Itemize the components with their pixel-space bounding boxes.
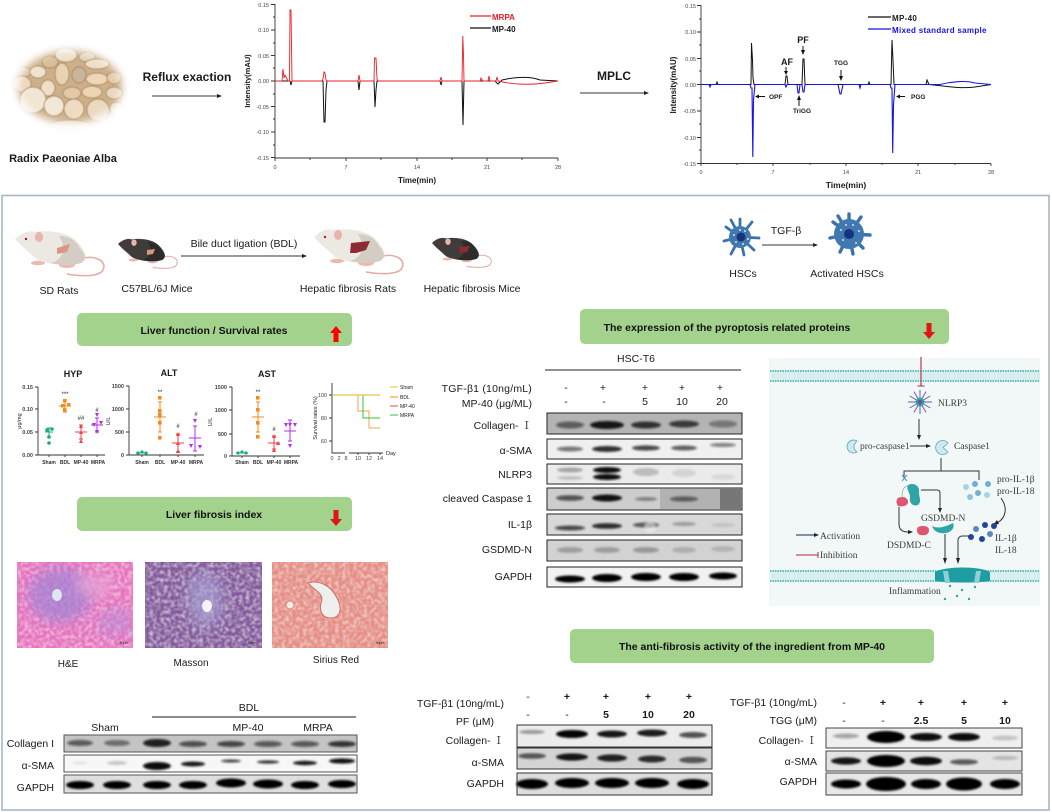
image: H&E histology — [17, 562, 133, 648]
chart: MP-40 vs mixed standard chromatogram: 28 — [988, 170, 994, 176]
western blot: in vivo: Collagen I — [7, 738, 54, 750]
panel: main experimental frame — [2, 196, 1049, 810]
western blot: in vivo: α-SMA — [22, 760, 54, 772]
icon: SD rat — [15, 231, 104, 276]
treatment grid: - — [526, 709, 530, 721]
membrane: bottom — [770, 571, 1040, 581]
treatment grid: 20 — [716, 396, 728, 408]
chart: HYP: ## — [78, 416, 85, 422]
treatment grid: - — [526, 691, 530, 703]
chart: HYP: 0.05 — [22, 430, 33, 436]
label: Masson: Masson — [173, 658, 209, 669]
treatment grid: 5 — [642, 396, 648, 408]
banner: liver fibrosis index: Liver fibrosis index — [166, 509, 262, 521]
legend: MP-40 / mixed standard: Mixed standard sample — [892, 26, 987, 35]
label: DSDMD-C: DSDMD-C — [887, 541, 931, 551]
chart: MRPA vs MP-40 chromatogram: 0 — [273, 165, 277, 171]
label: IL mature — [995, 534, 1017, 556]
chart: survival rates — [313, 383, 415, 462]
chart: survival rates: Survival rates (%) — [313, 396, 319, 440]
chart: HYP: Sham — [42, 460, 56, 466]
treatment grid: + — [603, 691, 609, 703]
trace: mixed standard blue — [701, 81, 991, 157]
label: H&E: H&E — [58, 659, 79, 670]
western blot: HSC-T6 pyroptosis: HSC-T6 — [617, 353, 655, 365]
legend: activation / inhibition — [796, 532, 860, 561]
label: Radix Paeoniae Alba: Radix Paeoniae Alba — [9, 153, 118, 165]
chart: ALT: 1500 — [112, 384, 124, 390]
chart: MP-40 vs mixed standard chromatogram: -0.10 — [683, 136, 696, 142]
label: IL mature: IL-18 — [995, 546, 1017, 556]
image: Masson histology: 50μm — [248, 641, 256, 645]
icon: HSC — [724, 219, 759, 255]
banner: pyroptosis proteins — [580, 309, 949, 344]
blot: Collagen I — [64, 735, 357, 752]
chart: HYP: 0.15 — [22, 385, 33, 391]
image: Sirius Red histology — [272, 562, 388, 648]
blot: Collagen-I — [547, 413, 742, 434]
treatment grid — [526, 691, 695, 721]
icon: Caspase1 — [936, 440, 948, 455]
chart: survival rates: 10 — [355, 456, 361, 462]
chart: survival rates: 80 — [321, 416, 327, 422]
treatment grid: 5 — [603, 709, 609, 721]
treatment grid: + — [961, 697, 967, 709]
icon: red up arrow — [330, 326, 342, 342]
label: Hepatic fibrosis Mice: Hepatic fibrosis Mice — [424, 283, 521, 295]
peak labels: OPF — [769, 94, 782, 101]
western blot: HSC-T6 pyroptosis: IL-1β — [508, 519, 532, 531]
icon: activated HSC — [830, 214, 870, 254]
legend: survival groups: Sham — [400, 385, 413, 391]
chart: AST: MRPA — [284, 460, 299, 466]
treatment grid: - — [881, 715, 885, 727]
banner: pyroptosis proteins: The expression of the pyroptosis related proteins — [604, 322, 851, 334]
chart: HYP: HYP — [64, 369, 82, 379]
chart: MRPA vs MP-40 chromatogram: 14 — [414, 165, 420, 171]
western blot: HSC-T6 pyroptosis: Collagen- Ⅰ — [474, 420, 532, 432]
chart: AST: # — [272, 427, 276, 433]
blot: Collagen-I — [826, 728, 1022, 748]
western blot: HSC-T6 pyroptosis: TGF-β1 (10ng/mL) — [442, 383, 532, 395]
chart: survival rates: Day — [386, 451, 396, 457]
arrow: pro-IL to IL — [993, 498, 1005, 525]
chart: ALT: BDL — [155, 460, 165, 466]
arrow: to GSDMD-N — [921, 490, 942, 513]
western blot: PF treatment: TGF-β1 (10ng/mL) — [417, 698, 504, 710]
chart: MP-40 vs mixed standard chromatogram: -0.15 — [683, 162, 696, 168]
label: Bile duct ligation: Bile duct ligation (BDL) — [191, 238, 297, 250]
western blot: in vivo: MRPA — [303, 722, 333, 734]
chart: HYP: MRPA — [91, 460, 106, 466]
arrow: reflux extraction — [152, 94, 222, 98]
chart: AST — [208, 369, 300, 466]
chart: survival rates: 12 — [366, 456, 372, 462]
treatment grid: + — [642, 382, 648, 394]
chart: MRPA vs MP-40 chromatogram: 7 — [344, 165, 348, 171]
chart: AST: 0 — [224, 454, 227, 460]
peak labels — [755, 35, 925, 115]
treatment grid: 5 — [961, 715, 967, 727]
arrow: pro-caspase to caspase — [910, 444, 931, 448]
icon: hepatic fibrosis rat — [314, 229, 403, 274]
treatment grid: + — [600, 382, 606, 394]
chart: survival rates: 14 — [377, 456, 383, 462]
peak labels: TGG — [834, 60, 848, 67]
legend: survival groups: MRPA — [400, 413, 415, 419]
icon: red down arrow — [330, 510, 342, 526]
chart: ALT: 500 — [115, 430, 124, 436]
chart: ALT: ALT — [161, 368, 178, 378]
icon: full-length GSDMD — [896, 475, 920, 506]
chart: MP-40 vs mixed standard chromatogram: 21 — [915, 170, 921, 176]
chart: MP-40 vs mixed standard chromatogram: 0.15 — [685, 4, 696, 10]
western blot: HSC-T6 pyroptosis: GAPDH — [495, 571, 532, 583]
label: pro-IL: pro-IL-18 — [997, 487, 1035, 497]
label: pro-IL: pro-IL-1β — [997, 475, 1035, 485]
icon: hepatic fibrosis mouse — [432, 238, 491, 267]
chart: survival rates: 0 — [330, 456, 334, 462]
label: SD Rats: SD Rats — [39, 285, 79, 297]
western blot: TGG treatment: TGF-β1 (10ng/mL) — [730, 697, 817, 709]
blot: α-SMA — [517, 748, 712, 769]
arrow: NLRP3 to caspase — [917, 419, 921, 440]
chart: AST: 1000 — [215, 408, 227, 414]
arrow: activation — [762, 243, 818, 247]
banner: liver fibrosis index — [77, 497, 352, 531]
chart: HYP: # — [95, 408, 99, 414]
western blot: PF treatment — [417, 691, 712, 795]
label: HSCs: HSCs — [729, 268, 757, 280]
label: C57BL/6J Mice: C57BL/6J Mice — [121, 283, 193, 295]
banner: liver function: Liver function / Survival rates — [140, 325, 288, 337]
treatment grid: - — [564, 382, 568, 394]
chart: MRPA vs MP-40 chromatogram: Time(min) — [398, 176, 436, 185]
branch connector — [904, 458, 979, 480]
legend: survival groups: MP-40 — [400, 404, 415, 410]
western blot: in vivo: Sham — [91, 722, 119, 734]
western blot: in vivo — [7, 702, 357, 794]
chart: ALT: MRPA — [189, 460, 204, 466]
chart: ALT: # — [176, 424, 180, 430]
icon: GSDMD-N fragment — [932, 523, 954, 533]
chart: MP-40 vs mixed standard chromatogram: Intensity(mAU) — [669, 56, 678, 113]
western blot: TGG treatment — [730, 697, 1022, 795]
label: Activated HSCs: Activated HSCs — [810, 268, 884, 280]
chart: ALT: ** — [158, 390, 163, 396]
peak labels: PGG — [911, 94, 925, 101]
blot: GSDMD-N — [547, 540, 742, 561]
blot: GAPDH — [516, 773, 712, 795]
chart: MRPA vs MP-40 chromatogram: 0.15 — [258, 3, 269, 9]
blot: α-SMA — [826, 751, 1022, 771]
treatment grid: + — [717, 382, 723, 394]
legend: activation / inhibition: Activation — [820, 532, 860, 542]
chart: AST: AST — [258, 369, 277, 379]
treatment grid: 10 — [999, 715, 1011, 727]
icon: red down arrow — [923, 323, 935, 339]
chart: HYP: *** — [61, 392, 69, 398]
treatment grid: + — [679, 382, 685, 394]
chart: MRPA vs MP-40 chromatogram: 0.05 — [258, 54, 269, 60]
western blot: in vivo: GAPDH — [17, 782, 54, 794]
peak labels: AF — [781, 57, 793, 67]
chart: MP-40 vs mixed standard chromatogram: 0.10 — [685, 30, 696, 36]
western blot: PF treatment: α-SMA — [472, 757, 504, 769]
chart: MRPA vs MP-40 chromatogram: Intensity(mAU) — [243, 54, 252, 108]
western blot: HSC-T6 pyroptosis: α-SMA — [500, 445, 532, 457]
chart: MP-40 vs mixed standard chromatogram: Time(min) — [826, 180, 866, 190]
icon: NLRP3 — [908, 390, 932, 414]
label: Hepatic fibrosis Rats: Hepatic fibrosis Rats — [300, 283, 396, 295]
chart: MP-40 vs mixed standard chromatogram: 14 — [843, 170, 849, 176]
chart: MP-40 vs mixed standard chromatogram: 7 — [771, 170, 775, 176]
treatment grid: - — [564, 396, 568, 408]
chart: HYP: 0.10 — [22, 407, 33, 413]
trace: MP-40 black — [275, 77, 558, 125]
legend: MP-40 / mixed standard — [868, 14, 987, 35]
treatment grid: 20 — [683, 709, 695, 721]
western blot: TGG treatment: Collagen- Ⅰ — [759, 735, 817, 747]
image: H&E histology: 50μm — [120, 641, 128, 645]
label: IL mature: IL-1β — [995, 534, 1017, 544]
trace: MP-40 black — [701, 40, 991, 88]
treatment grid: - — [842, 697, 846, 709]
western blot: PF treatment: PF (μM) — [456, 716, 494, 728]
chart: AST: 1500 — [215, 385, 227, 391]
peak labels: TriGG — [793, 108, 811, 115]
chart: ALT: U/L — [106, 417, 112, 425]
treatment grid: + — [918, 697, 924, 709]
western blot: PF treatment: GAPDH — [467, 778, 504, 790]
treatment grid: - — [602, 396, 606, 408]
western blot: HSC-T6 pyroptosis: cleaved Caspase 1 — [443, 493, 532, 505]
treatment grid: + — [686, 691, 692, 703]
chart: AST: U/L — [208, 418, 214, 426]
legend: MP-40 / mixed standard: MP-40 — [892, 14, 917, 23]
chart: AST: 500 — [218, 432, 227, 438]
chart: MP-40 vs mixed standard chromatogram — [669, 4, 994, 190]
chart: ALT: Sham — [135, 460, 149, 466]
chart: MRPA vs MP-40 chromatogram: 0.10 — [258, 28, 269, 34]
treatment grid — [564, 382, 728, 408]
chart: MRPA vs MP-40 chromatogram: -0.10 — [256, 130, 269, 136]
chart: survival rates: 100 — [318, 393, 327, 399]
dots: pro-IL — [963, 481, 991, 500]
western blot: HSC-T6 pyroptosis — [442, 353, 742, 587]
chart: MP-40 vs mixed standard chromatogram: 0.05 — [685, 57, 696, 63]
image: Sirius Red histology: 50μm — [376, 641, 384, 645]
legend: MRPA / MP-40 — [470, 13, 516, 34]
treatment grid: + — [645, 691, 651, 703]
diagram: NLRP3 pyroptosis pathway — [769, 357, 1040, 606]
chart: HYP: μg/mg — [17, 413, 23, 429]
label: pro-IL — [997, 475, 1035, 497]
arrow: to DSDMD-C — [899, 507, 913, 534]
chart: HYP — [17, 369, 106, 466]
label: NLRP3: NLRP3 — [938, 399, 967, 409]
western blot: HSC-T6 pyroptosis: MP-40 (μg/ML) — [462, 398, 532, 410]
inhibition line — [918, 357, 924, 386]
legend: activation / inhibition: Inhibition — [820, 551, 858, 561]
legend: MRPA / MP-40: MRPA — [492, 13, 515, 22]
blot: α-SMA — [64, 755, 357, 772]
chart: MRPA vs MP-40 chromatogram: 0.00 — [258, 79, 269, 85]
blot: Collagen-I — [517, 725, 712, 747]
chart: ALT: 1000 — [112, 407, 124, 413]
dots: IL mature — [968, 522, 997, 542]
banner: anti-fibrosis ingredient: The anti-fibrosis activity of the ingredient from MP-40 — [619, 641, 885, 653]
arrow: IL to pore — [956, 536, 969, 564]
treatment grid: - — [565, 709, 569, 721]
chart: MRPA vs MP-40 chromatogram: 28 — [555, 165, 561, 171]
arrow: MPLC — [580, 91, 649, 95]
chart: survival rates: 8 — [344, 456, 348, 462]
label: TGF-β: TGF-β — [771, 225, 801, 237]
western blot: HSC-T6 pyroptosis: GSDMD-N — [482, 544, 532, 556]
trace: MRPA red — [275, 10, 558, 84]
chart: AST: ** — [256, 390, 261, 396]
label: Sirius Red: Sirius Red — [313, 655, 359, 666]
chart: MRPA vs MP-40 chromatogram: -0.05 — [256, 105, 269, 111]
treatment grid: 10 — [642, 709, 654, 721]
chart: MP-40 vs mixed standard chromatogram: 0.00 — [685, 83, 696, 89]
treatment grid: 10 — [676, 396, 688, 408]
chart: MRPA vs MP-40 chromatogram: 21 — [484, 165, 490, 171]
banner: anti-fibrosis ingredient — [570, 629, 934, 663]
label: GSDMD-N: GSDMD-N — [921, 514, 965, 524]
western blot: HSC-T6 pyroptosis: NLRP3 — [498, 469, 532, 481]
label: MPLC: MPLC — [597, 69, 631, 83]
chart: ALT: 0 — [121, 453, 124, 459]
chart: ALT — [106, 368, 204, 466]
legend: survival groups — [390, 385, 415, 419]
chart: HYP: MP-40 — [74, 460, 89, 466]
icon: C57BL/6J mouse — [118, 239, 177, 268]
blot: NLRP3 — [547, 464, 742, 484]
dots: released cytokines — [944, 585, 976, 600]
blot: α-SMA — [547, 439, 742, 459]
treatment grid — [842, 697, 1011, 727]
chart: survival rates: 2 — [337, 456, 341, 462]
blot: GAPDH — [826, 773, 1022, 795]
chart: AST: BDL — [253, 460, 263, 466]
icon: DSDMD-C fragment — [917, 526, 929, 535]
image: Masson histology — [145, 562, 262, 648]
treatment grid: + — [564, 691, 570, 703]
legend: survival groups: BDL — [400, 395, 410, 401]
banner: liver function — [77, 313, 352, 346]
herb photo: Radix Paeoniae Alba — [12, 46, 127, 128]
label: Inflammation: Inflammation — [889, 586, 941, 597]
chart: MP-40 vs mixed standard chromatogram: -0.05 — [683, 109, 696, 115]
arrow: BDL — [181, 254, 307, 258]
treatment grid: + — [1002, 697, 1008, 709]
icon: GSDMD pore — [935, 568, 990, 583]
treatment grid: + — [880, 697, 886, 709]
western blot: PF treatment: Collagen- Ⅰ — [446, 735, 504, 747]
chart: MRPA vs MP-40 chromatogram — [243, 3, 561, 185]
western blot: in vivo: BDL — [239, 702, 259, 714]
western blot: TGG treatment: TGG (μM) — [770, 715, 817, 727]
peak labels: PF — [797, 35, 809, 45]
chart: MP-40 vs mixed standard chromatogram: 0 — [699, 170, 703, 176]
treatment grid: - — [842, 715, 846, 727]
label: Reflux exaction: Reflux exaction — [143, 70, 231, 84]
treatment grid: 2.5 — [914, 715, 928, 727]
membrane: top — [770, 371, 1040, 381]
blot: cleaved Caspase 1 — [547, 488, 742, 510]
chart: HYP: BDL — [60, 460, 70, 466]
chart: MRPA vs MP-40 chromatogram: -0.15 — [256, 156, 269, 162]
chart: AST: MP-40 — [267, 460, 282, 466]
legend: MRPA / MP-40: MP-40 — [492, 25, 516, 34]
chart: ALT: # — [194, 412, 198, 418]
western blot: TGG treatment: α-SMA — [785, 756, 817, 768]
label: Caspase1: Caspase1 — [954, 442, 990, 452]
western blot: in vivo: MP-40 — [233, 722, 264, 734]
icon: pro-caspase1 — [847, 440, 857, 453]
blot: GAPDH — [64, 775, 357, 793]
label: pro-caspase1: pro-caspase1 — [860, 442, 910, 452]
chart: ALT: MP-40 — [171, 460, 186, 466]
chart: AST: Sham — [235, 460, 249, 466]
chart: HYP: 0.00 — [22, 453, 33, 459]
blot: GAPDH — [547, 567, 742, 587]
western blot: TGG treatment: GAPDH — [780, 776, 817, 788]
arrow: GSDMD-N to pore — [943, 534, 947, 564]
blot: IL-1β — [547, 514, 742, 535]
chart: survival rates: 60 — [321, 439, 327, 445]
